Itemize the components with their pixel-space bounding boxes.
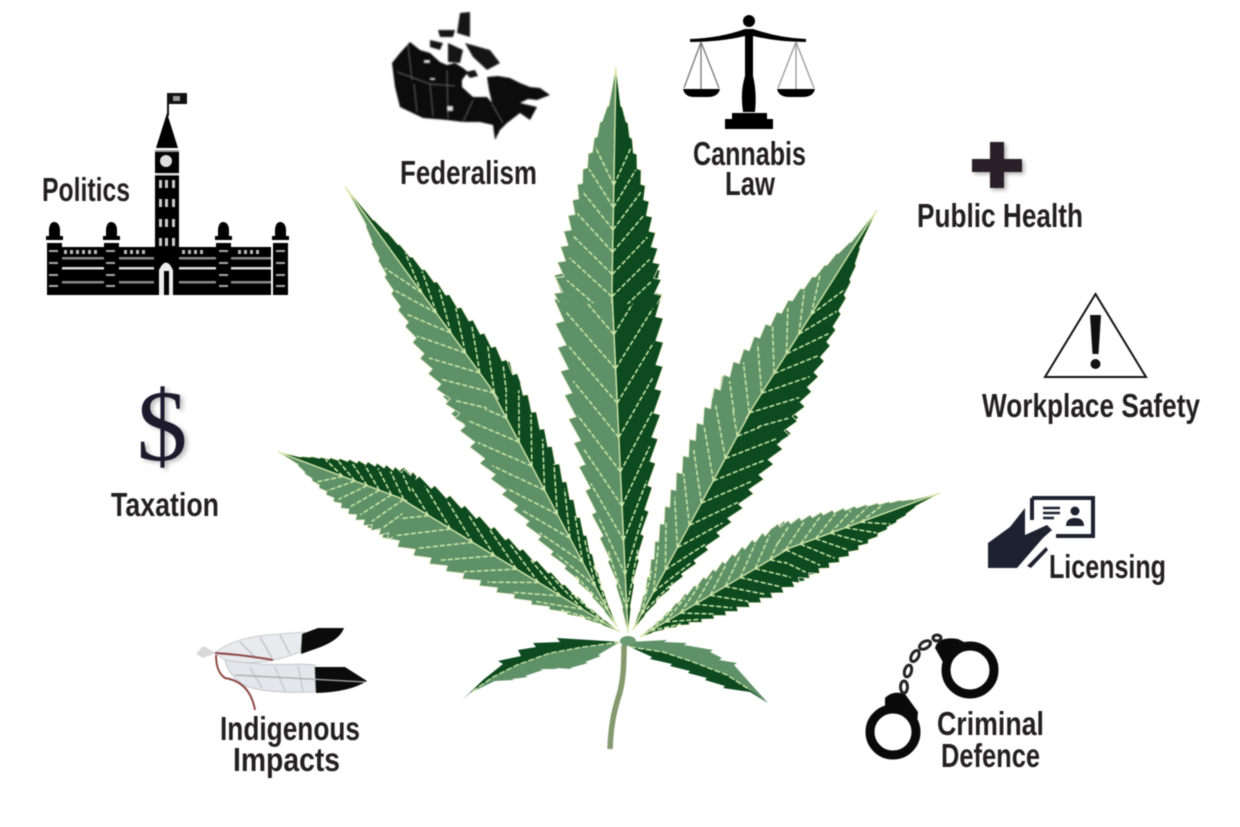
label: Public Health: Public Health — [917, 197, 1083, 234]
icon: handcuffs — [870, 635, 994, 755]
leaflet: upper left — [307, 133, 659, 649]
label: Indigenous Impacts: Indigenous — [220, 710, 360, 747]
cannabis leaf — [158, 0, 958, 749]
arctic islands — [430, 12, 500, 78]
feather two — [225, 660, 315, 692]
icon: map of Canada — [392, 12, 550, 140]
leaflet: far left — [158, 340, 635, 669]
icon: hand holding ID card — [988, 498, 1093, 568]
great lakes — [424, 60, 453, 111]
chain — [900, 635, 941, 693]
label: Indigenous Impacts — [220, 710, 360, 778]
feather one — [215, 632, 305, 663]
head and beam — [743, 15, 755, 27]
leaflet: lower left — [462, 638, 620, 700]
label: Criminal Defence — [937, 705, 1044, 774]
leaflet: centre — [538, 0, 678, 636]
icon: warning triangle — [1045, 294, 1146, 377]
label: Criminal Defence: Criminal — [937, 705, 1044, 742]
rings — [946, 646, 994, 694]
leaflet: lower right — [628, 640, 768, 703]
tower — [155, 150, 179, 295]
label: Criminal Defence: Defence — [941, 737, 1040, 774]
right pan — [778, 42, 814, 90]
leaflet: far right — [626, 436, 958, 668]
leaflet: upper right — [593, 164, 916, 652]
label: Politics: Politics — [42, 171, 130, 208]
wings — [61, 247, 271, 295]
locks — [935, 638, 972, 664]
leaf centre node — [620, 636, 636, 646]
label: Indigenous Impacts: Impacts — [233, 741, 340, 778]
label: Licensing: Licensing — [1049, 548, 1166, 585]
icon: dollar sign: $ — [136, 370, 188, 483]
province lines — [397, 45, 503, 123]
flag — [167, 93, 187, 116]
icon: scales of justice — [683, 15, 815, 129]
icon: parliament building — [46, 93, 289, 295]
icon: medical plus — [972, 142, 1022, 188]
leaf stem — [610, 645, 624, 749]
base — [725, 113, 773, 129]
icon: feathers — [196, 628, 367, 710]
plume — [196, 646, 216, 658]
label: Cannabis Law — [693, 135, 806, 202]
label: Cannabis Law: Law — [725, 165, 775, 202]
card — [1032, 498, 1093, 536]
hand — [988, 508, 1052, 568]
label: Cannabis Law: Cannabis — [693, 135, 806, 172]
turrets — [46, 222, 63, 295]
spire — [156, 113, 178, 148]
label: Taxation: Taxation — [111, 486, 219, 523]
left pan — [684, 42, 719, 90]
mainland — [392, 42, 550, 140]
door arch — [159, 262, 173, 295]
exclamation mark — [1090, 315, 1101, 354]
string — [215, 653, 273, 710]
label: Federalism: Federalism — [400, 154, 537, 191]
